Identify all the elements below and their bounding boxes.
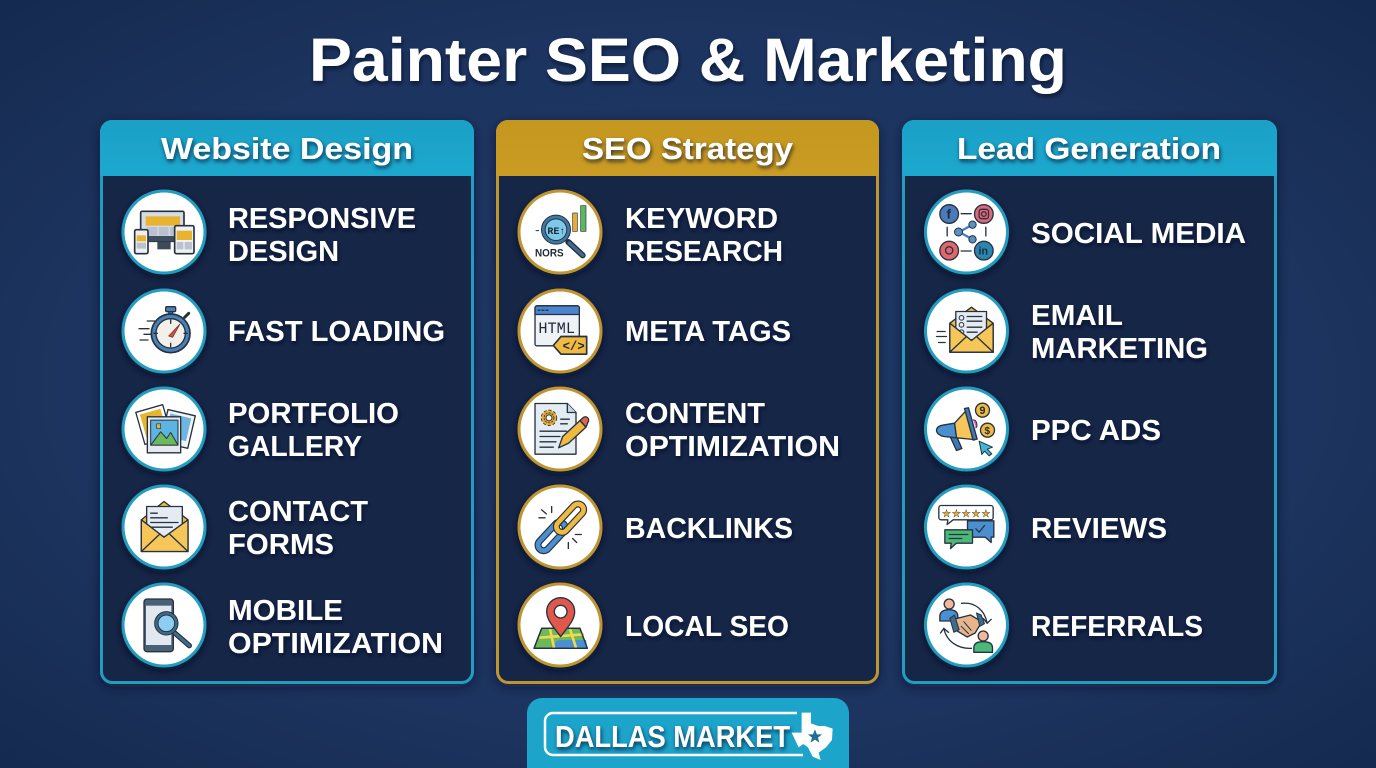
icon: texas with star <box>792 713 833 760</box>
item: reviews: REVIEWS <box>1031 513 1167 545</box>
item: email marketing <box>926 290 1208 372</box>
item: local seo <box>519 584 789 666</box>
item: content optimization: OPTIMIZATION <box>625 431 840 463</box>
icon: keyword magnifier: RE↑ <box>547 226 565 237</box>
item: content optimization <box>519 388 840 470</box>
item: portfolio gallery <box>123 388 399 470</box>
icon: document with gear and pencil <box>535 404 589 454</box>
heading: lead generation: Lead Generation <box>957 131 1221 166</box>
item: fast loading <box>123 290 445 372</box>
item: social media: SOCIAL MEDIA <box>1031 218 1246 250</box>
icon: referral handshake <box>940 599 992 652</box>
item: contact forms <box>123 486 368 568</box>
icon: html window with code tag: HTML <box>538 320 575 338</box>
item: meta tags: META TAGS <box>625 316 791 348</box>
item: contact forms: CONTACT <box>228 496 368 528</box>
icon: social network: f <box>947 207 952 222</box>
title: Painter SEO & Marketing <box>309 26 1067 94</box>
item: mobile optimization: OPTIMIZATION <box>228 628 443 660</box>
icon: photo gallery <box>136 405 195 453</box>
icon: keyword magnifier: NORS <box>535 248 564 260</box>
item: fast loading: FAST LOADING <box>228 316 445 348</box>
item: responsive design: DESIGN <box>228 236 339 268</box>
icon: email envelope <box>937 307 993 352</box>
footer badge: dallas market <box>527 698 849 768</box>
icon: social network <box>940 205 993 260</box>
item: email marketing: EMAIL <box>1031 300 1123 332</box>
item: content optimization: CONTENT <box>625 398 765 430</box>
icon: stopwatch <box>139 307 190 353</box>
heading: website design: Website Design <box>161 131 413 166</box>
icon: review speech bubbles: ★★★★★ <box>942 508 990 520</box>
item: mobile optimization <box>123 584 443 666</box>
panel: website design <box>100 120 474 682</box>
icon: megaphone with coins: 9 <box>979 405 985 417</box>
item: portfolio gallery: PORTFOLIO <box>228 398 399 430</box>
item: contact forms: FORMS <box>228 529 334 561</box>
item: reviews <box>926 486 1167 568</box>
item: mobile optimization: MOBILE <box>228 595 343 627</box>
item: responsive design: RESPONSIVE <box>228 203 416 235</box>
item: responsive design <box>123 191 416 273</box>
icon: megaphone with coins <box>937 403 994 456</box>
icon: html window with code tag <box>535 306 587 354</box>
icon: html window with code tag: </> <box>563 339 585 354</box>
item: referrals <box>926 584 1203 666</box>
panel: seo strategy <box>496 120 879 682</box>
icon: responsive devices <box>135 211 194 254</box>
icon: phone with magnifier <box>144 599 189 652</box>
item: keyword research: RESEARCH <box>625 236 783 268</box>
item: email marketing: MARKETING <box>1031 333 1208 365</box>
item: backlinks <box>519 486 793 568</box>
item: portfolio gallery: GALLERY <box>228 431 362 463</box>
item: referrals: REFERRALS <box>1031 611 1203 643</box>
heading: seo strategy: SEO Strategy <box>582 131 794 166</box>
panel: lead generation <box>902 120 1277 682</box>
icon: keyword magnifier <box>535 206 586 260</box>
item: keyword research: KEYWORD <box>625 203 778 235</box>
badge text: DALLAS MARKET <box>555 719 790 754</box>
icon: chain link <box>536 502 586 553</box>
icon: envelope <box>141 502 188 551</box>
icon: review speech bubbles <box>939 506 994 548</box>
item: meta tags <box>519 290 791 372</box>
item: ppc ads: PPC ADS <box>1031 415 1161 447</box>
badge outline <box>545 713 803 755</box>
icon: megaphone with coins: $ <box>984 426 990 437</box>
item: keyword research <box>519 191 783 273</box>
item: ppc ads <box>926 388 1161 470</box>
icon: map with pin <box>534 598 587 648</box>
item: backlinks: BACKLINKS <box>625 513 793 545</box>
item: local seo: LOCAL SEO <box>625 611 789 643</box>
item: social media <box>926 191 1246 273</box>
icon: social network: in <box>978 246 988 258</box>
